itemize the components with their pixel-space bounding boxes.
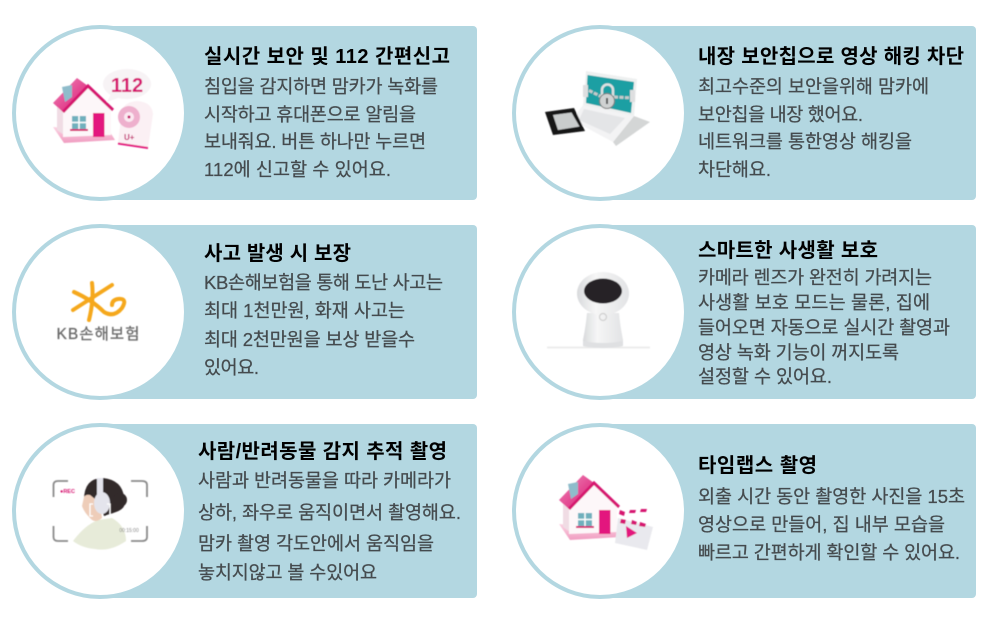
icon: KB insurance logo: KB손해보험 <box>56 325 140 343</box>
icon: house with 112 bubble and camera <box>53 69 153 148</box>
text block: 보안칩을 내장 했어요. <box>698 104 863 125</box>
text block: 네트워크를 통한영상 해킹을 <box>698 131 912 152</box>
circle frame <box>514 425 686 597</box>
icon: KB insurance logo <box>56 283 140 343</box>
icon: woman with headphones in viewfinder: ●REC <box>60 489 75 495</box>
heading: 사고 발생 시 보장 <box>204 242 351 265</box>
icon: chained laptop and chip <box>545 71 650 146</box>
text block: 112에 신고할 수 있어요. <box>204 159 391 180</box>
icon: woman with headphones in viewfinder: 00:15:00 <box>119 528 139 534</box>
panel: real-time security and 112 report <box>14 26 477 200</box>
text block: 최고수준의 보안을위해 맘카에 <box>698 76 929 97</box>
heading: 내장 보안칩으로 영상 해킹 차단 <box>698 45 964 68</box>
text block: 사생활 보호 모드는 물론, 집에 <box>698 292 930 313</box>
panel: time-lapse recording <box>514 424 976 598</box>
card background <box>110 225 477 399</box>
circle frame <box>14 425 186 597</box>
text block: 상하, 좌우로 움직이면서 촬영해요. <box>198 502 461 523</box>
text block <box>204 76 438 180</box>
text block: 최대 2천만원을 보상 받을수 <box>204 329 415 350</box>
card background <box>610 26 976 200</box>
text block: 있어요. <box>204 357 259 378</box>
icon: house with 112 bubble and camera: 112 <box>111 75 143 97</box>
text block: 영상 녹화 기능이 꺼지도록 <box>698 342 899 363</box>
text block: KB손해보험을 통해 도난 사고는 <box>204 272 443 293</box>
text block: 외출 시간 동안 촬영한 사진을 15초 <box>698 486 965 507</box>
text block: 보내줘요. 버튼 하나만 누르면 <box>204 131 426 152</box>
text block: 침입을 감지하면 맘카가 녹화를 <box>204 76 438 97</box>
text block: 차단해요. <box>698 159 771 180</box>
text block <box>698 267 950 387</box>
card background <box>110 26 477 200</box>
heading: 실시간 보안 및 112 간편신고 <box>204 45 450 68</box>
text block: 시작하고 휴대폰으로 알림을 <box>204 104 416 125</box>
text block: 영상으로 만들어, 집 내부 모습을 <box>698 514 945 535</box>
circle frame <box>514 27 686 199</box>
text block: 놓치지않고 볼 수있어요 <box>198 562 377 583</box>
text block <box>198 470 461 583</box>
text block <box>698 76 929 180</box>
text block: 맘카 촬영 각도안에서 움직임을 <box>198 533 434 554</box>
panel: accident compensation <box>14 225 477 399</box>
heading: 사람/반려동물 감지 추적 촬영 <box>198 440 447 463</box>
card background <box>610 424 976 598</box>
text block: 최대 1천만원, 화재 사고는 <box>204 300 405 321</box>
panel: smart privacy protection <box>514 225 976 399</box>
circle frame <box>514 226 686 398</box>
icon: woman with headphones in viewfinder <box>54 478 147 550</box>
text block: 설정할 수 있어요. <box>698 366 832 387</box>
icon: house with 112 bubble and camera: U+ <box>124 133 135 142</box>
text block: 빠르고 간편하게 확인할 수 있어요. <box>698 542 960 563</box>
panel: person and pet tracking <box>14 424 477 598</box>
heading: 타임랩스 촬영 <box>698 454 817 477</box>
text block: 사람과 반려동물을 따라 카메라가 <box>198 470 451 491</box>
heading: 스마트한 사생활 보호 <box>698 239 878 262</box>
circle frame <box>14 27 186 199</box>
icon: robot camera <box>547 272 650 348</box>
icon: house with video clapper <box>559 475 653 550</box>
card background <box>610 225 976 399</box>
card background <box>110 424 477 598</box>
circle frame <box>14 226 186 398</box>
text block <box>204 272 443 378</box>
panel: built-in security chip <box>514 26 976 200</box>
text block: 들어오면 자동으로 실시간 촬영과 <box>698 317 950 338</box>
text block: 카메라 렌즈가 완전히 가려지는 <box>698 267 932 288</box>
text block <box>698 486 965 563</box>
